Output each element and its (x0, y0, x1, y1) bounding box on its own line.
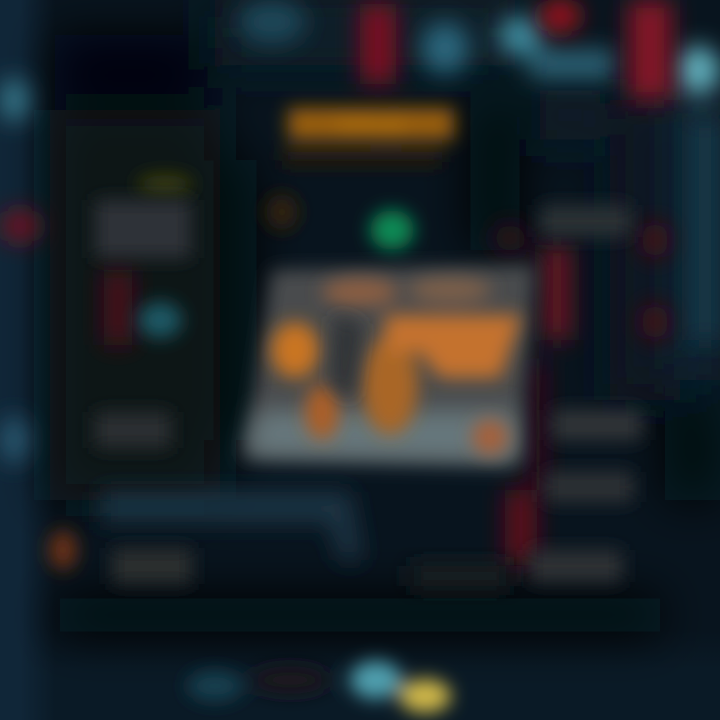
text block: lower right (545, 472, 633, 502)
icon: teal marker (138, 302, 182, 338)
text block: bottom right (530, 550, 622, 582)
title (282, 108, 454, 164)
map dark ocean band (332, 315, 362, 400)
text block: bottom centre (410, 565, 510, 587)
text block: middle left (95, 412, 171, 448)
icon: green marker (370, 210, 414, 250)
map lower glow (245, 410, 518, 462)
top teal highlights (0, 0, 720, 464)
red bars (0, 0, 672, 565)
legend chips (187, 661, 451, 713)
continents (271, 278, 522, 455)
icon: yellow marker (137, 175, 193, 193)
band under map (100, 492, 362, 560)
panel: world map (245, 265, 535, 462)
text block: bottom left (112, 548, 192, 584)
text block: upper right (540, 205, 630, 237)
icon: amber marker (266, 194, 298, 230)
title: TITLE (337, 113, 403, 140)
text block: middle right (552, 410, 642, 440)
map background (245, 265, 535, 462)
icon: orange marker (49, 530, 77, 570)
text block: upper left (95, 200, 191, 258)
